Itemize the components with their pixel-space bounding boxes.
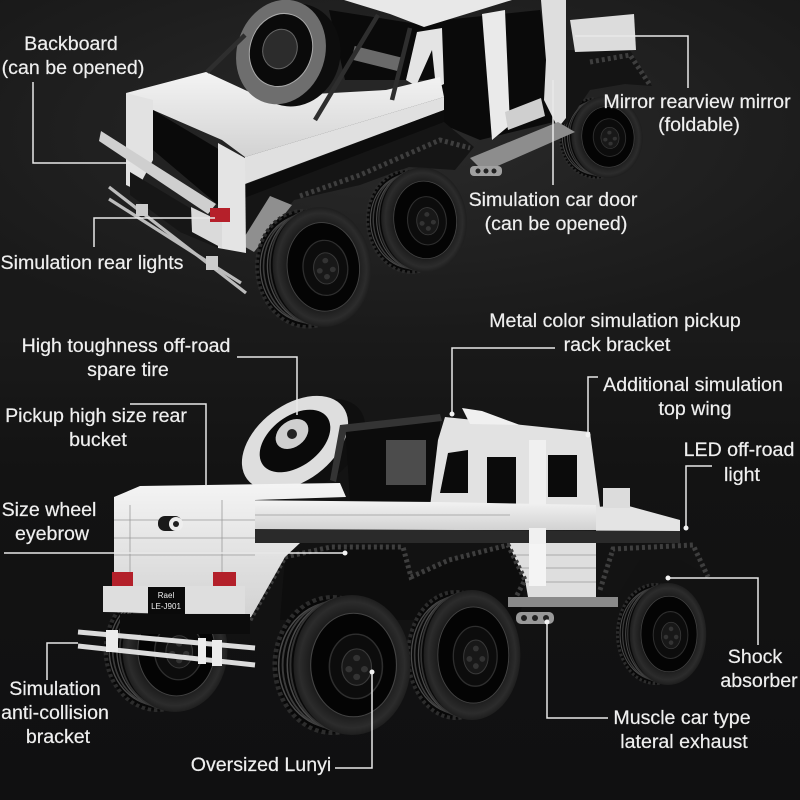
leader: lunyi xyxy=(335,670,374,768)
bed lower side xyxy=(222,500,596,530)
leader: exhaust xyxy=(544,620,608,718)
rear opening xyxy=(153,110,220,205)
label: spare tire: High toughness off-road xyxy=(22,335,230,357)
wheel: top rear xyxy=(362,163,472,278)
rear lights red xyxy=(112,572,236,587)
label: mirror: Mirror rearview mirror xyxy=(603,91,791,113)
label: mirror: (foldable) xyxy=(658,114,740,136)
door center pillar xyxy=(482,10,510,140)
rear divider lines xyxy=(114,500,510,572)
anti-collision bumper bars xyxy=(78,630,255,666)
label: car door: (can be opened) xyxy=(485,213,627,235)
wheel: rear left xyxy=(105,588,228,712)
leader: top wing xyxy=(586,377,598,438)
label: rear lights: Simulation rear lights xyxy=(1,252,184,274)
cab interior bottom xyxy=(345,418,440,505)
label: top wing: Additional simulation xyxy=(603,374,783,396)
bed side wall xyxy=(245,97,444,184)
label: lunyi: Oversized Lunyi xyxy=(191,754,331,776)
black side band xyxy=(241,110,444,198)
wheel: front xyxy=(617,583,706,685)
underbody dark xyxy=(120,614,250,634)
label: shock absorber: Shock xyxy=(728,646,782,668)
hood xyxy=(596,505,680,532)
leader: spare tire xyxy=(237,357,297,415)
label: rear bucket: bucket xyxy=(69,429,127,451)
leader: shock absorber xyxy=(666,576,758,645)
plate: Rael xyxy=(158,591,174,600)
right rear pillar xyxy=(218,143,246,253)
door lower xyxy=(508,543,596,597)
wheel: top mid xyxy=(250,202,377,334)
engine parts xyxy=(386,440,426,485)
door pillar over strip xyxy=(529,528,546,544)
label: rear bucket: Pickup high size rear xyxy=(5,405,187,427)
bottom truck: side rear view xyxy=(78,377,710,735)
label: anti-collision bracket: bracket xyxy=(26,726,91,748)
leader: car door xyxy=(552,80,554,185)
leader: anti-collision bracket xyxy=(47,643,78,680)
label: pickup rack: rack bracket xyxy=(564,334,671,356)
front fender holes xyxy=(600,545,708,590)
bumper top xyxy=(109,187,246,293)
door pillar xyxy=(529,440,546,583)
label: backboard: (can be opened) xyxy=(2,57,144,79)
front fender xyxy=(600,543,710,600)
cab interior far xyxy=(329,10,562,140)
plate xyxy=(148,587,185,614)
rear bumper block xyxy=(103,586,245,614)
cab roof detail xyxy=(462,408,520,425)
black side strip xyxy=(253,529,680,543)
tail light red xyxy=(210,208,230,222)
wheel: top front xyxy=(555,93,647,183)
fender strut xyxy=(240,196,292,252)
engine bay parts xyxy=(351,46,403,72)
wheel: mid bottom xyxy=(274,595,410,735)
label: spare tire: spare tire xyxy=(87,359,169,381)
door sill white xyxy=(505,98,545,130)
label: car door: Simulation car door xyxy=(469,189,638,211)
bed top deck xyxy=(126,72,444,157)
lower rear body xyxy=(130,172,218,248)
fenders rear xyxy=(250,545,525,620)
LED light xyxy=(603,488,630,508)
leader: rear lights xyxy=(94,218,215,247)
left rear pillar xyxy=(126,93,153,190)
door sill xyxy=(470,122,575,172)
top truck: opened rear view xyxy=(99,0,652,334)
wheel: rear bottom xyxy=(408,590,520,720)
plate: LE-J901 xyxy=(151,602,181,611)
leader: pickup rack xyxy=(450,348,555,416)
roll bars top xyxy=(207,15,410,120)
rear handle xyxy=(158,516,183,531)
spare tire top xyxy=(223,0,354,119)
leader: mirror xyxy=(575,36,688,88)
leader: rear bucket xyxy=(130,404,206,486)
fender dark xyxy=(241,122,474,246)
leader: LED light xyxy=(684,466,712,530)
label: exhaust: lateral exhaust xyxy=(620,731,748,753)
cab body xyxy=(430,417,600,507)
label: LED light: light xyxy=(724,464,761,486)
side step xyxy=(508,597,618,607)
door lines xyxy=(515,555,596,582)
label: shock absorber: absorber xyxy=(720,670,798,692)
cab windows xyxy=(440,450,577,505)
front fender top truck xyxy=(555,50,652,125)
fender interior xyxy=(280,545,525,620)
roll bar xyxy=(330,414,442,482)
label: wheel eyebrow: eyebrow xyxy=(15,523,90,545)
spare tire bottom xyxy=(224,377,383,512)
exhaust top xyxy=(470,166,502,176)
fender holes front top xyxy=(590,55,650,85)
backboard xyxy=(99,131,216,214)
label: anti-collision bracket: anti-collision xyxy=(1,702,109,724)
fender holes top xyxy=(300,140,470,196)
lower rear block xyxy=(191,207,222,248)
label: top wing: top wing xyxy=(659,398,731,420)
leader: backboard xyxy=(33,82,130,163)
cab pillar xyxy=(406,28,444,88)
label: LED light: LED off-road xyxy=(684,439,794,461)
label: pickup rack: Metal color simulation pickup xyxy=(489,310,741,332)
label: exhaust: Muscle car type xyxy=(613,707,751,729)
label: anti-collision bracket: Simulation xyxy=(9,678,101,700)
exhaust bottom xyxy=(516,612,554,624)
hood top truck xyxy=(570,14,636,52)
label: wheel eyebrow: Size wheel xyxy=(2,499,96,521)
leader: wheel eyebrow xyxy=(4,550,348,556)
cab roof xyxy=(344,0,512,27)
label: backboard: Backboard xyxy=(24,33,118,55)
open door xyxy=(541,0,566,128)
rear face xyxy=(114,483,346,617)
door pillar lower xyxy=(529,543,546,586)
